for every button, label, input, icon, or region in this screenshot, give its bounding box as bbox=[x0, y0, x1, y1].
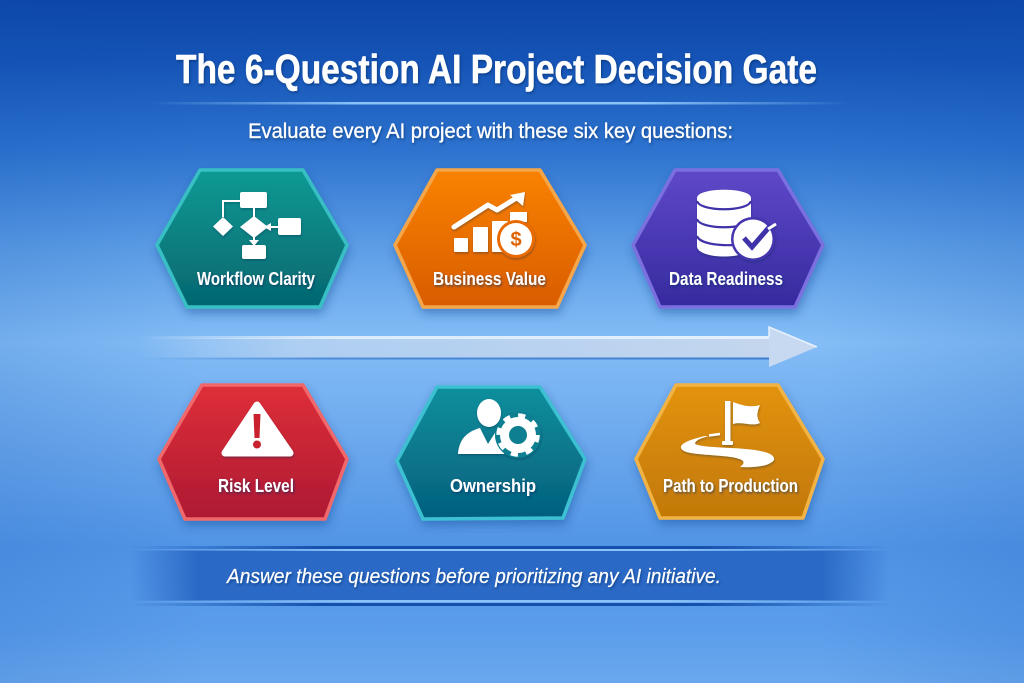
footer band bbox=[130, 546, 890, 606]
icon: database with check bbox=[697, 190, 776, 261]
hexagon: Business Value bbox=[395, 170, 585, 307]
label: Ownership bbox=[450, 476, 536, 496]
label: Data Readiness bbox=[669, 269, 783, 289]
subtitle: Evaluate every AI project with these six key questions: bbox=[248, 120, 733, 143]
label: Risk Level bbox=[218, 476, 294, 496]
hexagon: Data Readiness bbox=[633, 170, 823, 307]
arrow bbox=[140, 327, 817, 367]
footer text: Answer these questions before prioritizing any AI initiative. bbox=[225, 565, 721, 588]
hexagon: Path to Production bbox=[636, 385, 823, 518]
icon: warning triangle bbox=[225, 405, 290, 453]
icon: rising bars and coin bbox=[454, 192, 535, 258]
title underline bbox=[150, 102, 850, 104]
icon: person with gear bbox=[458, 399, 541, 458]
label: Business Value bbox=[433, 269, 546, 289]
label: Path to Production bbox=[663, 476, 798, 496]
title: The 6-Question AI Project Decision Gate bbox=[176, 46, 817, 92]
label: Workflow Clarity bbox=[197, 269, 315, 289]
icon: rising bars and coin: $ bbox=[510, 229, 522, 251]
hexagon: Ownership bbox=[397, 387, 585, 519]
icon: workflow diagram bbox=[213, 192, 301, 259]
icon: flag on winding road bbox=[681, 401, 774, 467]
hexagon: Workflow Clarity bbox=[157, 170, 347, 307]
hexagon: Risk Level bbox=[159, 385, 347, 519]
